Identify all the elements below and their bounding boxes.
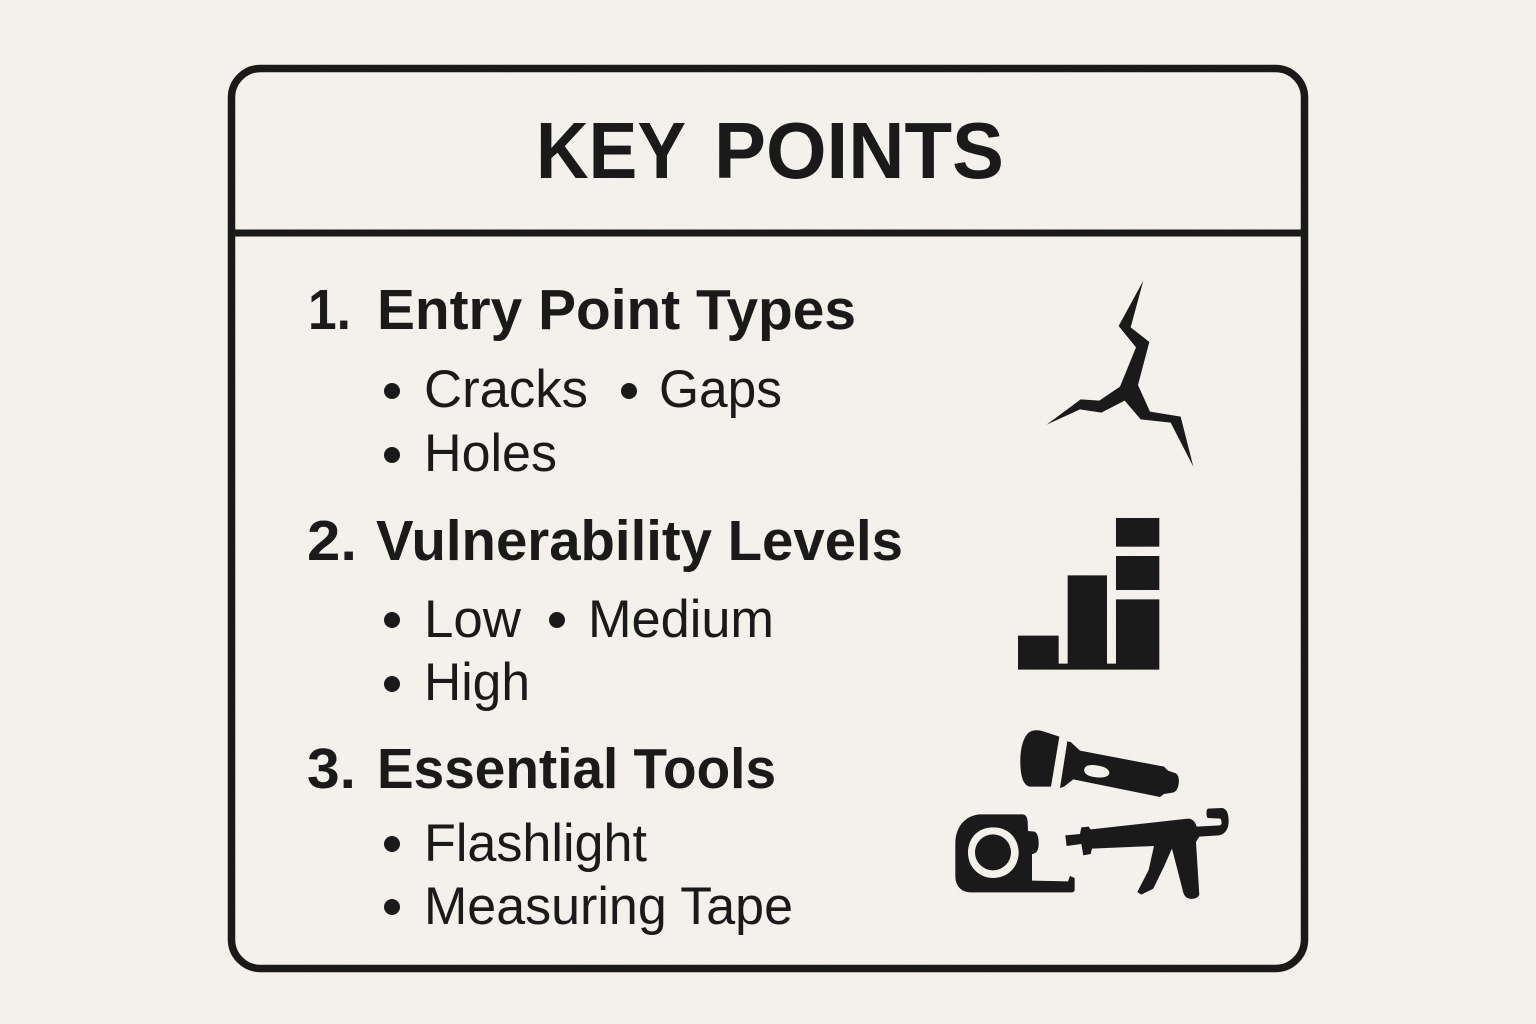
title [536, 106, 1004, 195]
list: cracks, gaps, holes: Holes [424, 424, 557, 483]
heading: vulnerability levels: 2. [307, 509, 357, 573]
section 2: vulnerability levels [307, 509, 903, 712]
icon: measuring tape [955, 814, 1075, 892]
icon: tools [955, 730, 1229, 899]
list: low, medium, high [384, 590, 774, 712]
heading: essential tools: 3. [307, 737, 356, 801]
heading: entry point types: Entry Point Types [377, 278, 856, 342]
list: low, medium, high: High [424, 653, 530, 712]
list: cracks, gaps, holes: Gaps [659, 360, 782, 419]
panel: key points card [232, 68, 1304, 968]
list: cracks, gaps, holes [384, 360, 782, 483]
section 1: entry point types [308, 278, 856, 483]
title: KEY [536, 106, 686, 195]
icon: bar chart levels [1018, 518, 1159, 670]
section 3: essential tools [307, 737, 793, 936]
list: flashlight, measuring tape: Flashlight [424, 814, 647, 873]
title: POINTS [714, 106, 1004, 195]
heading: vulnerability levels: Vulnerability Levels [376, 509, 903, 573]
list: low, medium, high: Medium [588, 590, 774, 649]
heading: essential tools: Essential Tools [377, 737, 776, 801]
list: cracks, gaps, holes: Cracks [424, 360, 588, 419]
list: flashlight, measuring tape: Measuring Tape [424, 877, 793, 936]
icon: crack [1047, 281, 1193, 467]
heading: entry point types: 1. [308, 278, 351, 342]
list: low, medium, high: Low [424, 590, 522, 649]
icon: flashlight [1020, 730, 1179, 797]
icon: caulk gun [1065, 808, 1229, 899]
list: flashlight, measuring tape [384, 814, 793, 936]
